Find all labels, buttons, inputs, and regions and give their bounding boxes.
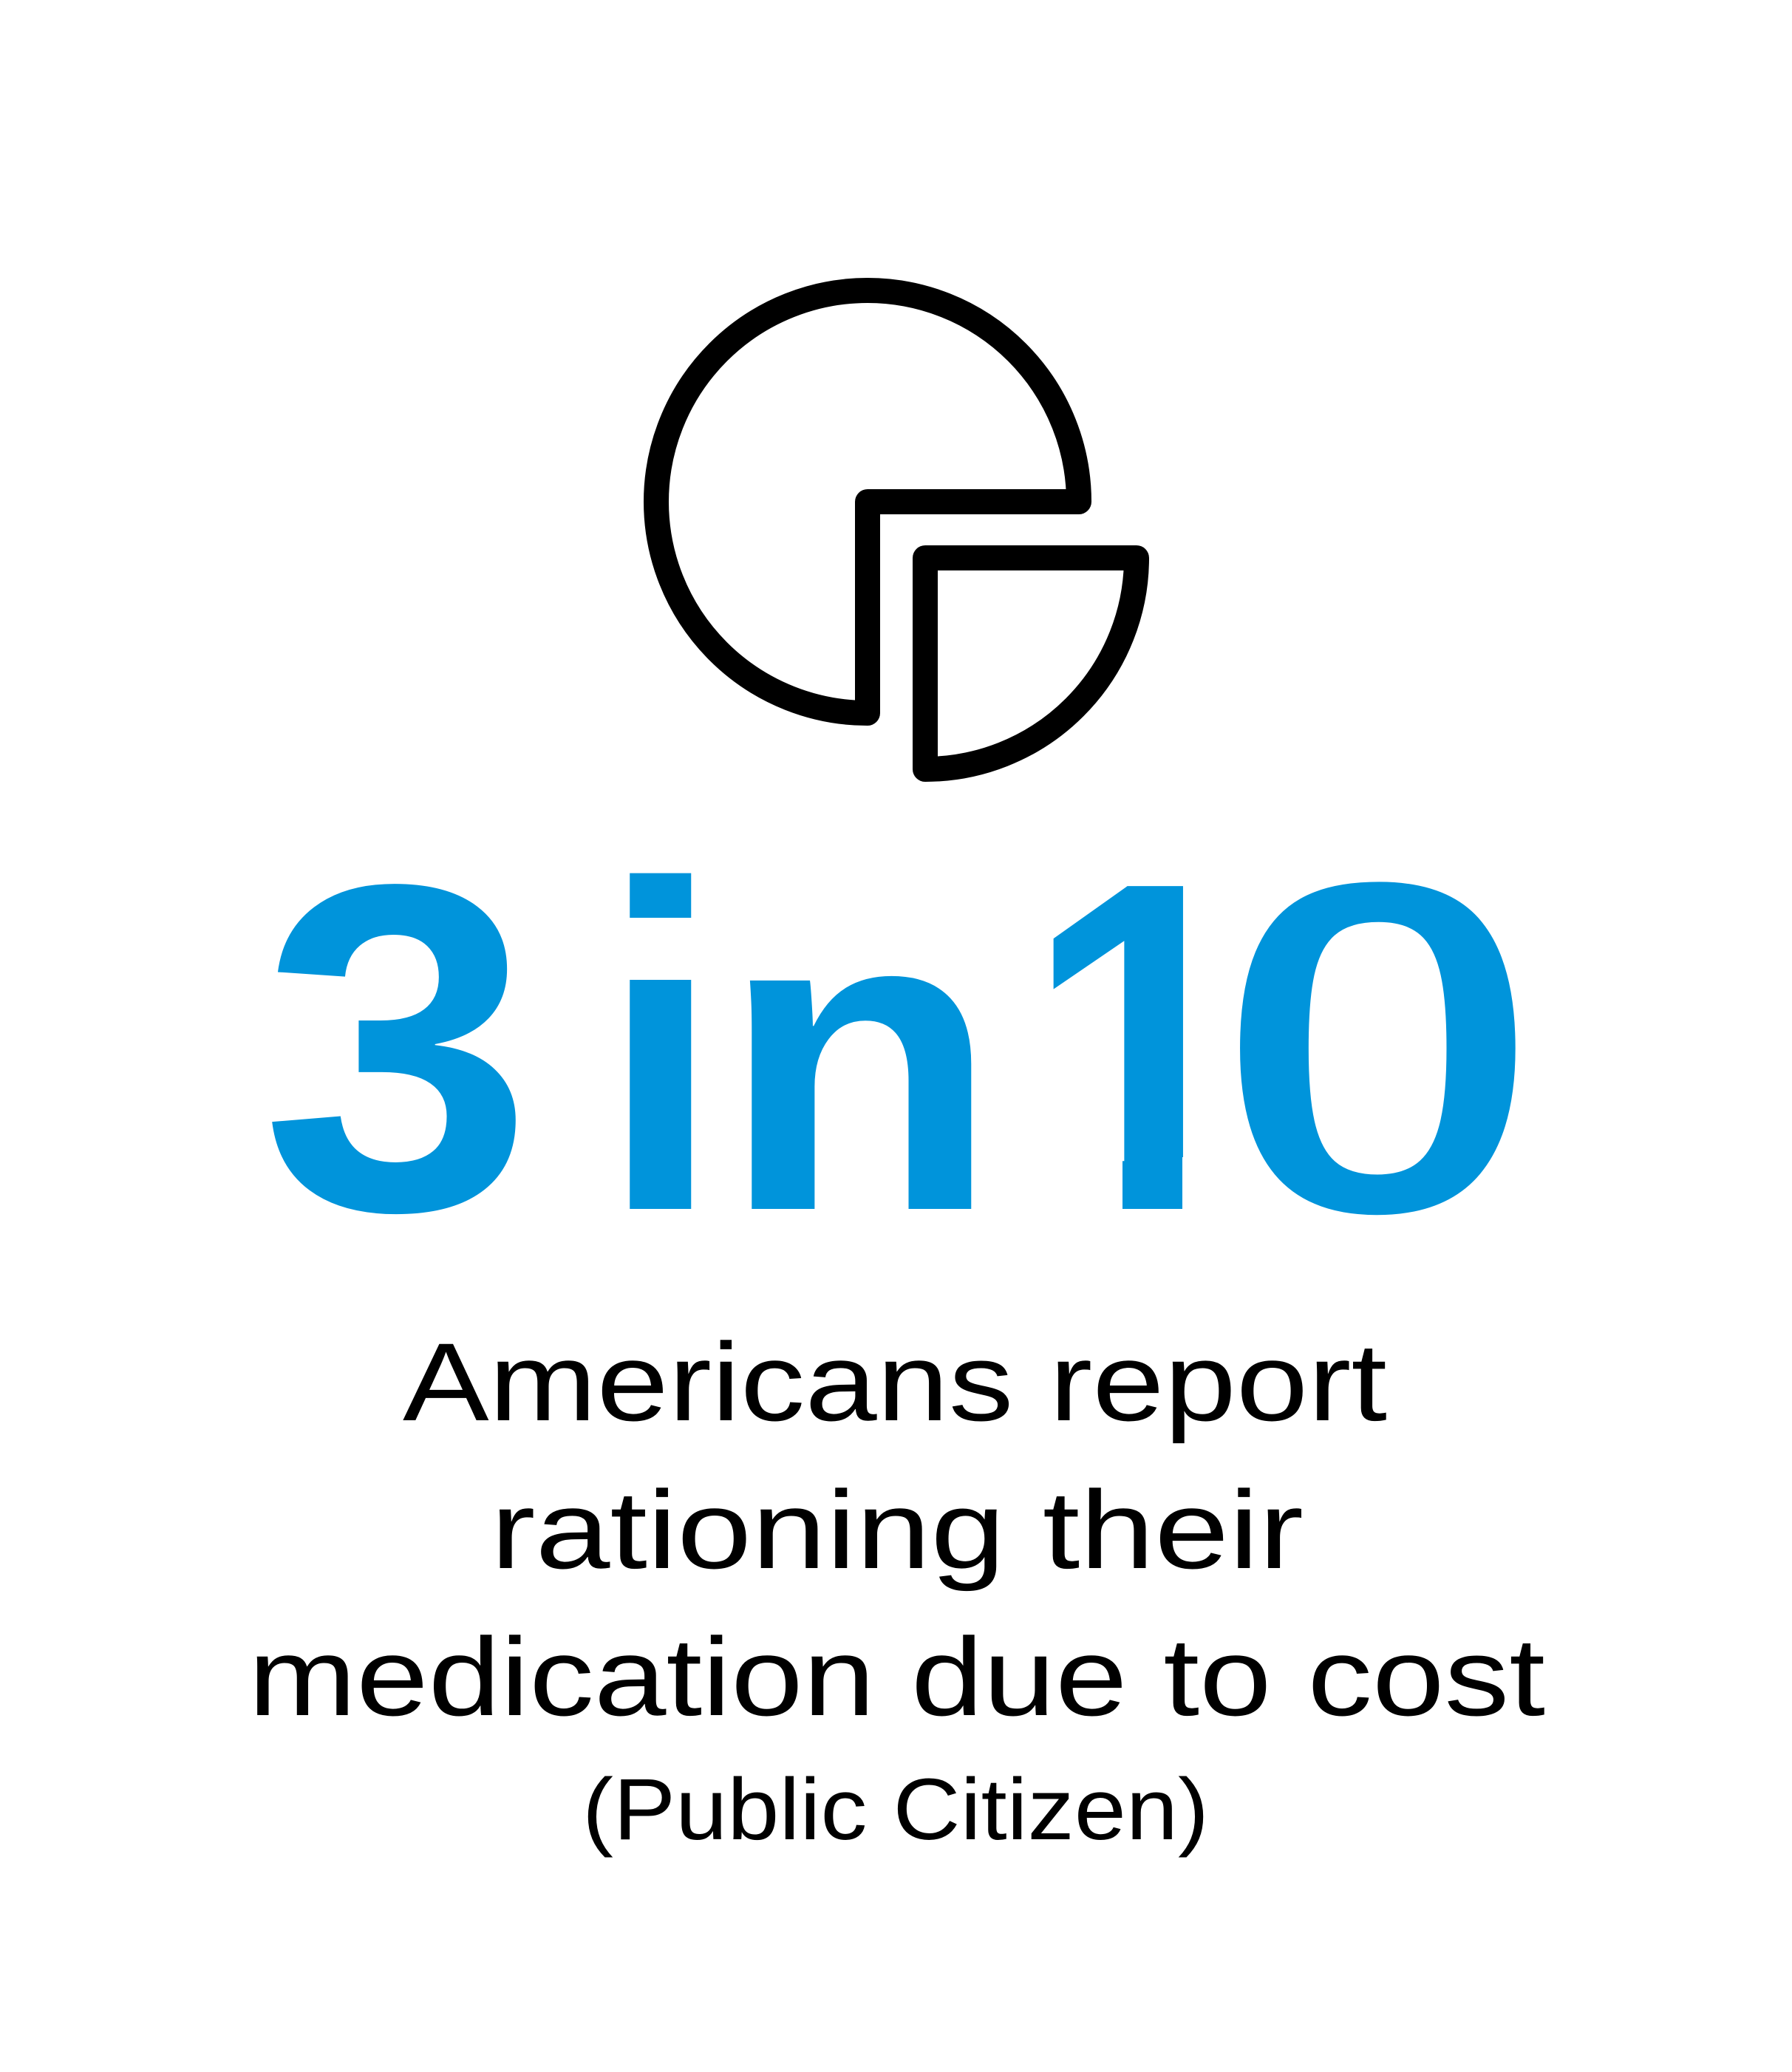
description text: medication due to cost <box>248 1615 1545 1739</box>
headline statistic: 3 in 10: n <box>720 817 1000 1301</box>
headline statistic: 3 in 10: 3 <box>261 788 534 1308</box>
source citation: (Public Citizen) <box>582 1761 1209 1858</box>
description text: rationing their <box>491 1468 1304 1592</box>
icon: pie chart with separated slice <box>656 290 1137 769</box>
headline statistic: 3 in 10: 0 <box>1208 775 1548 1320</box>
headline statistic: 3 in 10: i <box>599 789 723 1307</box>
headline statistic: 3 in 10 <box>272 873 1516 1215</box>
pie slice <box>925 558 1137 769</box>
description text: Americans report <box>403 1320 1387 1444</box>
pie body <box>656 290 1079 713</box>
description text <box>248 1320 1545 1858</box>
headline statistic: 3 in 10: 1 <box>1024 784 1263 1309</box>
